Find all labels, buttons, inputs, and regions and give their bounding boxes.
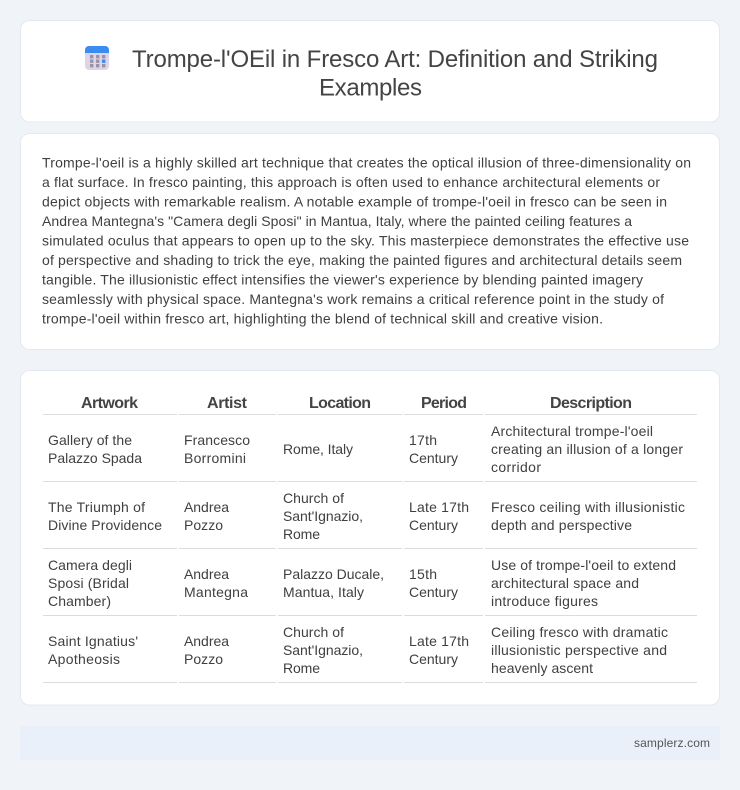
table row: Gallery of the Palazzo Spada: Palazzo Spada — [48, 450, 142, 466]
table row: The Triumph of Divine Providence: depth and perspective — [491, 517, 632, 533]
table row: Saint Ignatius' Apotheosis: Late 17th — [409, 633, 469, 649]
text block: definition of trompe-l'oeil: seamlessly with physical space. Mantegna's work remains a critical reference point in the study of — [42, 291, 664, 307]
table row: The Triumph of Divine Providence: Sant'Ignazio, — [283, 508, 363, 524]
table row: Saint Ignatius' Apotheosis: Pozzo — [184, 651, 223, 667]
table row: Camera degli Sposi: Palazzo Ducale, — [283, 566, 384, 582]
table row: Camera degli Sposi — [43, 557, 697, 616]
table header: Description — [550, 395, 632, 412]
table row: Gallery of the Palazzo Spada: creating an illusion of a longer — [491, 441, 683, 457]
table row: Saint Ignatius' Apotheosis: Century — [409, 651, 458, 667]
table header: Location — [309, 395, 371, 412]
panel: artworks table — [20, 370, 720, 705]
table row: The Triumph of Divine Providence: Rome — [283, 526, 320, 542]
table header: Period — [421, 395, 467, 412]
table row: Saint Ignatius' Apotheosis: Sant'Ignazio, — [283, 642, 363, 658]
table row: Camera degli Sposi: Camera degli — [48, 557, 132, 573]
table row: The Triumph of Divine Providence — [43, 490, 697, 548]
table row: Gallery of the Palazzo Spada: Architectural trompe-l'oeil — [491, 423, 653, 439]
table row: Saint Ignatius' Apotheosis: illusionistic perspective and — [491, 642, 667, 658]
text block: definition of trompe-l'oeil: tangible. The illusionistic effect intensifies the viewer's experience by blending painted imagery — [42, 271, 643, 287]
table row: Gallery of the Palazzo Spada: Francesco — [184, 432, 250, 448]
title: Examples — [319, 74, 422, 102]
text block: definition of trompe-l'oeil: depict objects with remarkable realism. A notable example of trompe-l'oeil in fresco can be seen in — [42, 193, 667, 209]
table header — [43, 395, 697, 414]
table row: Gallery of the Palazzo Spada: Gallery of the — [48, 432, 132, 448]
text block: definition of trompe-l'oeil: Trompe-l'oeil is a highly skilled art technique that creates the optical illusion of three-dimensionality on — [42, 154, 691, 170]
text block: definition of trompe-l'oeil: simulated oculus that appears to open up to the sky. This masterpiece demonstrates the effective use — [42, 232, 689, 248]
table row: Camera degli Sposi: Sposi (Bridal — [48, 575, 129, 591]
table row: Camera degli Sposi: 15th — [409, 566, 437, 582]
table row: The Triumph of Divine Providence: Fresco ceiling with illusionistic — [491, 499, 685, 515]
table row: Saint Ignatius' Apotheosis — [43, 624, 697, 682]
table row: Camera degli Sposi: introduce figures — [491, 593, 598, 609]
table row: Saint Ignatius' Apotheosis: Church of — [283, 624, 344, 640]
text block: definition of trompe-l'oeil: Andrea Mantegna's "Camera degli Sposi" in Mantua, Italy, where the painted ceiling features a — [42, 213, 632, 229]
table row: Saint Ignatius' Apotheosis: heavenly ascent — [491, 660, 593, 676]
panel: title card — [20, 20, 720, 122]
table header: Artist — [207, 395, 248, 412]
table row: Gallery of the Palazzo Spada: corridor — [491, 459, 541, 475]
table header: Artwork — [81, 395, 138, 412]
table row: Camera degli Sposi: Use of trompe-l'oeil to extend — [491, 557, 676, 573]
table row: The Triumph of Divine Providence: Divine Providence — [48, 517, 162, 533]
title — [132, 46, 658, 102]
footer: samplerz.com — [634, 736, 710, 750]
table row: Saint Ignatius' Apotheosis: Andrea — [184, 633, 229, 649]
table row: Camera degli Sposi: Mantegna — [184, 584, 248, 600]
table row: Gallery of the Palazzo Spada: Borromini — [184, 450, 246, 466]
table row: Saint Ignatius' Apotheosis: Rome — [283, 660, 320, 676]
table row: Saint Ignatius' Apotheosis: Apotheosis — [48, 651, 120, 667]
table row: Gallery of the Palazzo Spada: Century — [409, 450, 458, 466]
text block: definition of trompe-l'oeil: a flat surface. In fresco painting, this approach is often used to enhance architectural elements or — [42, 174, 660, 190]
table row: Camera degli Sposi: Andrea — [184, 566, 229, 582]
table row: Saint Ignatius' Apotheosis: Ceiling fresco with dramatic — [491, 624, 668, 640]
table row: Gallery of the Palazzo Spada: Rome, Italy — [283, 441, 353, 457]
icon: calendar — [85, 46, 109, 70]
table row: The Triumph of Divine Providence: Church of — [283, 490, 344, 506]
table row: Camera degli Sposi: Mantua, Italy — [283, 584, 364, 600]
table row: The Triumph of Divine Providence: Pozzo — [184, 517, 223, 533]
table row: Gallery of the Palazzo Spada: 17th — [409, 432, 437, 448]
table row: Camera degli Sposi: Chamber) — [48, 593, 111, 609]
table row: The Triumph of Divine Providence: Century — [409, 517, 458, 533]
table row: Saint Ignatius' Apotheosis: Saint Ignatius' — [48, 633, 138, 649]
table row: Gallery of the Palazzo Spada — [43, 423, 697, 482]
title: Trompe-l'OEil in Fresco Art: Definition and Striking — [132, 46, 658, 73]
table row: The Triumph of Divine Providence: Late 17th — [409, 499, 469, 515]
text block: definition of trompe-l'oeil: trompe-l'oeil within fresco art, highlighting the blend of technical skill and creative vision. — [42, 310, 603, 326]
text block: definition of trompe-l'oeil: of perspective and shading to trick the eye, making the painted figures and architectural details seem — [42, 252, 682, 268]
footer — [20, 726, 720, 760]
table row: Camera degli Sposi: architectural space and — [491, 575, 639, 591]
table row: Camera degli Sposi: Century — [409, 584, 458, 600]
table row: The Triumph of Divine Providence: Andrea — [184, 499, 229, 515]
panel: intro paragraph — [20, 134, 720, 350]
text block: definition of trompe-l'oeil — [42, 154, 691, 326]
table row: The Triumph of Divine Providence: The Triumph of — [48, 499, 145, 515]
